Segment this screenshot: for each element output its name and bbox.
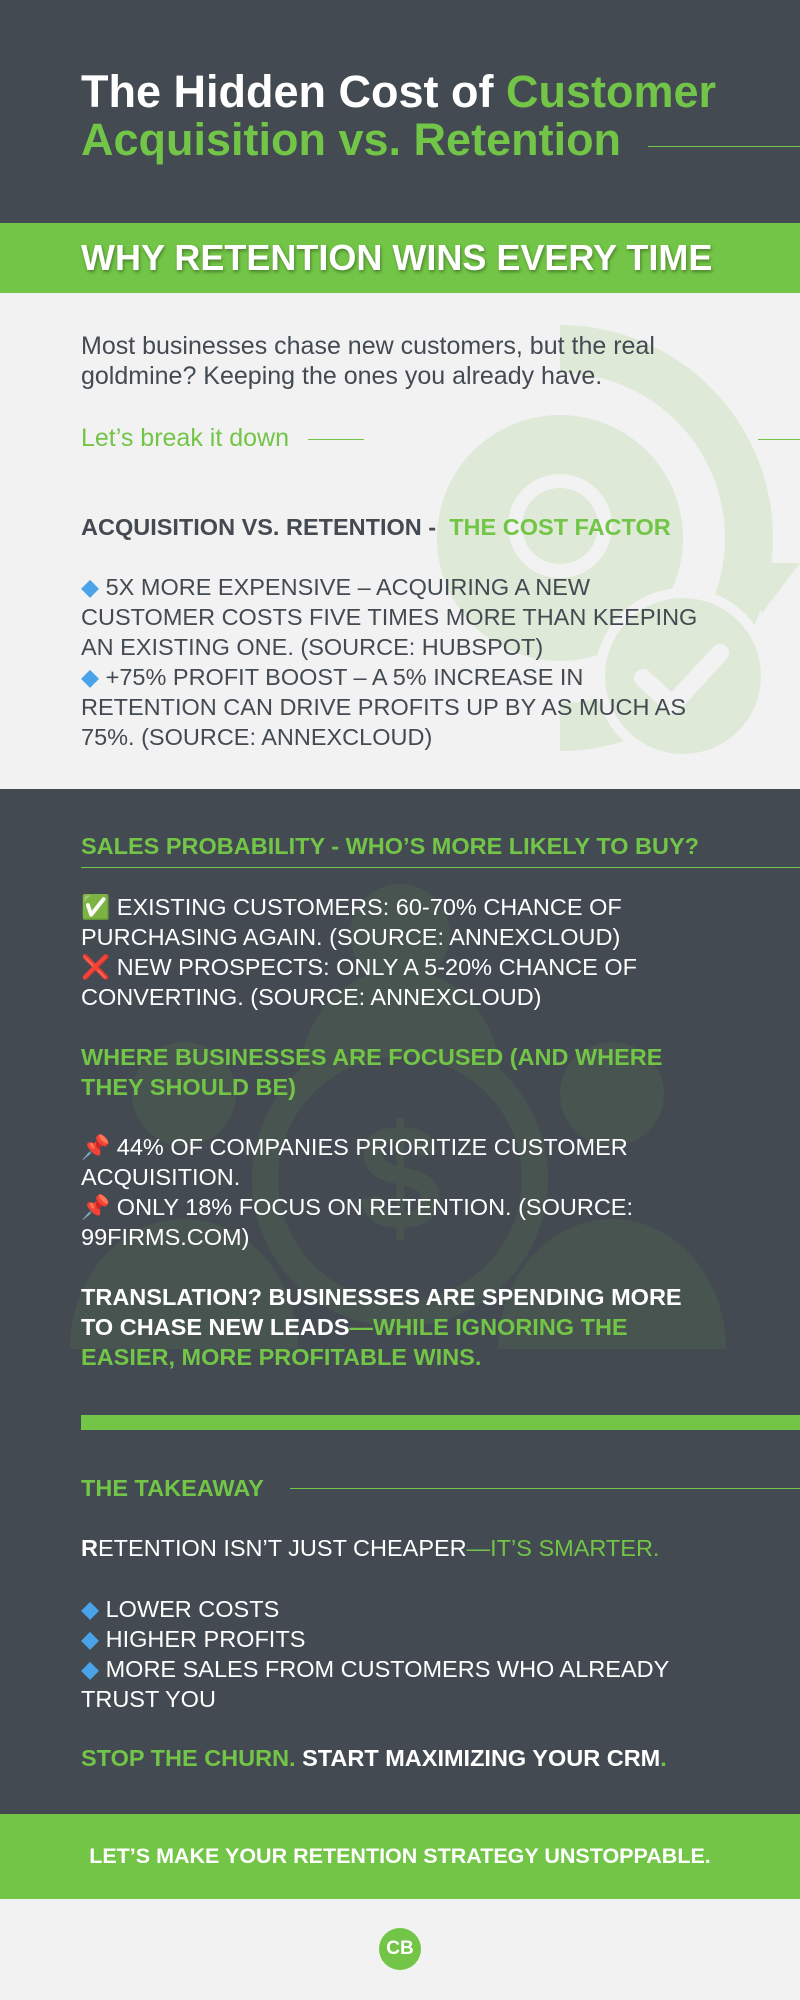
focus bullets: 📌 44% OF COMPANIES PRIORITIZE CUSTOMER xyxy=(81,1134,628,1160)
green banner: why retention wins xyxy=(0,223,800,293)
probability bullets: PURCHASING AGAIN. (SOURCE: ANNEXCLOUD) xyxy=(81,924,620,950)
focus bullets: 99FIRMS.COM) xyxy=(81,1224,249,1250)
cost bullets: ◆ +75% PROFIT BOOST – A 5% INCREASE IN xyxy=(81,664,583,690)
green banner: why retention wins: WHY RETENTION WINS EVERY TIME xyxy=(81,237,712,278)
dark panel: sales probability xyxy=(0,789,800,1814)
subheading: let's break it down: Let’s break it down xyxy=(81,424,289,452)
probability bullets: ❌ NEW PROSPECTS: ONLY A 5-20% CHANCE OF xyxy=(81,954,637,980)
cost bullets: 75%. (SOURCE: ANNEXCLOUD) xyxy=(81,724,432,750)
logo xyxy=(379,1928,421,1970)
cost bullets: RETENTION CAN DRIVE PROFITS UP BY AS MUCH AS xyxy=(81,694,686,720)
takeaway statement: RETENTION ISN’T JUST CHEAPER—IT’S SMARTER. xyxy=(81,1535,659,1561)
heading: cost factor: ACQUISITION VS. RETENTION - THE COST FACTOR xyxy=(81,514,671,540)
focus bullets xyxy=(81,1134,633,1250)
takeaway bullets: ◆ LOWER COSTS xyxy=(81,1596,279,1622)
probability bullets: CONVERTING. (SOURCE: ANNEXCLOUD) xyxy=(81,984,542,1010)
call to action line: STOP THE CHURN. START MAXIMIZING YOUR CRM. xyxy=(81,1745,667,1771)
takeaway bullets: ◆ MORE SALES FROM CUSTOMERS WHO ALREADY xyxy=(81,1656,669,1682)
translation callout xyxy=(81,1284,682,1370)
intro paragraph: Most businesses chase new customers, but the real xyxy=(81,332,655,360)
icon: money and people background: $ xyxy=(358,1093,442,1261)
heading: where businesses are focused: THEY SHOULD BE) xyxy=(81,1074,296,1100)
divider bar xyxy=(81,1415,800,1430)
cost bullets: ◆ 5X MORE EXPENSIVE – ACQUIRING A NEW xyxy=(81,574,590,600)
logo: CB xyxy=(386,1938,414,1959)
translation callout: TRANSLATION? BUSINESSES ARE SPENDING MORE xyxy=(81,1284,682,1310)
takeaway bullets: TRUST YOU xyxy=(81,1686,216,1712)
green footer banner: LET’S MAKE YOUR RETENTION STRATEGY UNSTOPPABLE. xyxy=(89,1844,711,1868)
cost bullets: CUSTOMER COSTS FIVE TIMES MORE THAN KEEPING xyxy=(81,604,697,630)
takeaway bullets xyxy=(81,1596,669,1712)
probability bullets: ✅ EXISTING CUSTOMERS: 60-70% CHANCE OF xyxy=(81,894,622,920)
focus bullets: 📌 ONLY 18% FOCUS ON RETENTION. (SOURCE: xyxy=(81,1194,633,1220)
probability bullets xyxy=(81,894,637,1010)
focus bullets: ACQUISITION. xyxy=(81,1164,240,1190)
icon: money and people background xyxy=(70,884,726,1349)
intro paragraph: goldmine? Keeping the ones you already have. xyxy=(81,362,602,390)
light panel: cost factor xyxy=(0,293,800,789)
title xyxy=(81,66,716,165)
translation callout: EASIER, MORE PROFITABLE WINS. xyxy=(81,1344,481,1370)
heading: sales probability: SALES PROBABILITY - WHO’S MORE LIKELY TO BUY? xyxy=(81,833,699,859)
title: Acquisition vs. Retention xyxy=(81,114,621,165)
translation callout: TO CHASE NEW LEADS—WHILE IGNORING THE xyxy=(81,1314,628,1340)
takeaway bullets: ◆ HIGHER PROFITS xyxy=(81,1626,305,1652)
cost bullets xyxy=(81,574,697,750)
green footer banner xyxy=(0,1814,800,1899)
heading: the takeaway: THE TAKEAWAY xyxy=(81,1475,264,1501)
icon: retention cycle background xyxy=(437,325,800,754)
title: The Hidden Cost of Customer xyxy=(81,66,716,117)
heading: where businesses are focused: WHERE BUSINESSES ARE FOCUSED (AND WHERE xyxy=(81,1044,662,1070)
heading: where businesses are focused xyxy=(81,1044,662,1100)
intro paragraph xyxy=(81,332,655,390)
header panel xyxy=(0,0,800,223)
cost bullets: AN EXISTING ONE. (SOURCE: HUBSPOT) xyxy=(81,634,543,660)
